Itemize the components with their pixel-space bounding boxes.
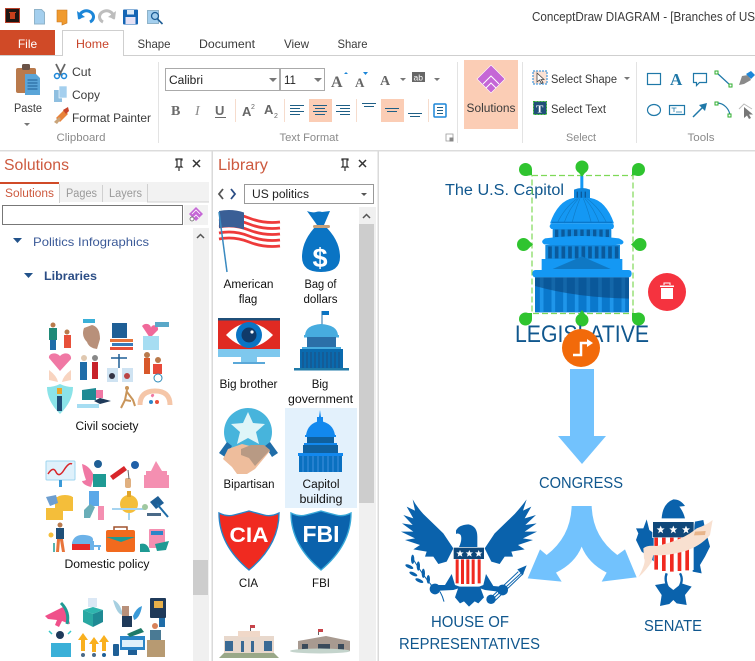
label: Domestic policy: Domestic policy (64, 559, 150, 571)
button: connector (562, 329, 600, 367)
label: Bipartisan: Bipartisan (224, 479, 274, 491)
library item: CIA (219, 511, 279, 590)
icon: new document (34, 10, 44, 24)
icons: paragraph alignment (290, 99, 446, 122)
text: HOUSE OF REPRESENTATIVES (399, 614, 540, 653)
library item: Bag of dollars: dollars (304, 294, 338, 306)
icon: curve tool (715, 102, 731, 117)
icon: selected U.S. Capitol building (532, 176, 633, 314)
library: elections (45, 598, 166, 657)
icon: FBI shield: FBI (302, 521, 340, 547)
icon: save (123, 10, 138, 24)
dropdown: US politics (244, 184, 374, 204)
text: HOUSE OF REPRESENTATIVES: HOUSE OF (431, 614, 509, 631)
foliage (636, 519, 654, 562)
label: Capitol building: Capitol (302, 479, 340, 491)
icon: arrow tool (693, 103, 707, 117)
text: HOUSE OF REPRESENTATIVES: REPRESENTATIVES (399, 636, 540, 653)
ribbon button: Solutions: Solutions (466, 103, 516, 115)
library item: Big government (288, 311, 354, 406)
icons: superscript and subscript: A (242, 104, 252, 119)
label: FBI: FBI (312, 578, 330, 590)
label: American flag: American (224, 279, 274, 291)
text: CONGRESS: CONGRESS (539, 475, 623, 492)
thumbnails: civil society icons (47, 319, 170, 414)
tab: View: View (284, 37, 309, 51)
icon: pen tool (739, 71, 755, 85)
panel: Library (218, 157, 376, 661)
library item: Big government: government (288, 394, 354, 406)
library item: FBI (291, 511, 351, 590)
icon: select shape (533, 71, 547, 84)
eagle head (662, 499, 685, 518)
icons: bold italic underline: B (171, 104, 180, 119)
icon: callout tool (694, 74, 706, 86)
ribbon button: Solutions (464, 60, 518, 129)
panel: Solutions (0, 157, 209, 661)
library item: Bipartisan (219, 408, 278, 491)
icon: shield with banner (Senate) (636, 499, 713, 606)
icon: solutions diamond (477, 65, 505, 93)
arrow: legislative to congress (558, 369, 606, 464)
icon: close (193, 160, 200, 167)
tab: File (0, 30, 55, 55)
quick access toolbar (6, 8, 162, 25)
scrollbar (359, 207, 376, 661)
right wing (485, 499, 537, 564)
icon: format painter (54, 107, 69, 124)
icon: select text: T (536, 104, 544, 116)
icons: superscript and subscript: 2 (274, 113, 278, 120)
font size dropdown (280, 68, 324, 90)
library item: Capitol building (selected): building (300, 494, 342, 506)
label: Select Text: Select Text (551, 104, 607, 116)
icons: font grow and shrink: A (331, 74, 343, 91)
icon: paste (16, 64, 40, 95)
icon: money bag: $ (312, 243, 328, 273)
ribbon (638, 520, 713, 577)
library item: Federal Reserve building (219, 625, 279, 658)
font name dropdown: Calibri (169, 75, 203, 87)
label: Big government: Big (312, 379, 328, 391)
icon: eagle with shield (House of Representatives) (401, 499, 537, 607)
tab: Solutions: Solutions (5, 188, 54, 200)
navigation arrows (219, 189, 223, 199)
icons: bold italic underline: U (215, 103, 224, 118)
label: Copy: Copy (72, 90, 100, 102)
library item: Big brother (218, 318, 280, 391)
tree item: Libraries (24, 269, 97, 283)
ribbon group: Clipboard (14, 64, 151, 144)
icon: redo (99, 11, 116, 22)
heading: Library: Library (218, 157, 268, 174)
arrow: split to house and senate (528, 506, 637, 582)
font name dropdown (166, 68, 280, 90)
library: Civil society (47, 319, 170, 433)
icon: cut (54, 64, 66, 78)
tab bar (0, 182, 209, 203)
icon: handshake with star (219, 408, 278, 474)
library: Domestic policy (46, 460, 169, 571)
icon: text tool: A (670, 70, 683, 89)
font size dropdown: 11 (284, 75, 296, 87)
tab: Share: Share (338, 37, 368, 51)
label: Bag of dollars: Bag of (304, 279, 337, 291)
tab: File: File (18, 37, 37, 51)
icon: government building (294, 311, 349, 370)
eagle shield (453, 547, 484, 559)
legs and tail (430, 574, 462, 591)
icon: text box tool (670, 106, 684, 114)
icon: CIA shield: CIA (230, 524, 268, 547)
ribbon group: Text Format (166, 68, 454, 144)
icon: copy (54, 86, 67, 102)
icon: undo (77, 11, 94, 22)
library item: Capitol building (selected) (285, 408, 357, 508)
icon: monitor with eye (218, 318, 280, 364)
ribbon tabs (0, 30, 755, 56)
dropdown: US politics: US politics (252, 189, 309, 201)
canvas: branches of US government diagram (399, 160, 713, 653)
text: The U.S. Capitol: The U.S. Capitol (445, 182, 564, 199)
text: SENATE: SENATE (644, 618, 702, 635)
icons: font grow and shrink: A (355, 75, 365, 90)
icon: pin (176, 159, 182, 171)
crossed arrows (666, 573, 682, 588)
search box (2, 206, 182, 224)
tab: Layers: Layers (109, 188, 142, 200)
button: delete (648, 273, 686, 311)
label: Select Shape: Select Shape (551, 74, 617, 86)
icons: font color and highlight: ab (414, 72, 423, 82)
icon: node tool (739, 104, 753, 119)
ribbon group: Select (533, 71, 630, 144)
library item: Bag of dollars (302, 211, 340, 306)
tab: Document: Document (199, 37, 256, 51)
laurel branch (405, 555, 433, 587)
icon: rectangle tool (648, 74, 660, 84)
icons: font color and highlight (380, 72, 440, 89)
icon: app logo (6, 8, 20, 22)
arrows bundle (490, 572, 523, 602)
tab: Pages: Pages (66, 188, 97, 200)
icon: capitol building (298, 410, 343, 472)
label: Tools: Tools (688, 132, 715, 144)
label: Text Format: Text Format (280, 132, 338, 144)
label: Paste: Paste (14, 103, 42, 115)
label: Civil society: Civil society (76, 421, 139, 433)
icon: close (359, 160, 366, 167)
label: Select: Select (566, 132, 596, 144)
icon: print preview (148, 10, 162, 24)
icon: american flag (219, 210, 280, 272)
tab: Home: Home (76, 37, 109, 51)
icons: superscript and subscript: 2 (251, 104, 255, 111)
icons: superscript and subscript: A (264, 102, 274, 117)
label: Format Painter: Format Painter (72, 113, 151, 125)
library item: American flag: flag (239, 294, 257, 306)
library item: Treasury building (290, 629, 350, 654)
scrollbar (193, 228, 209, 661)
senate shield (653, 522, 694, 538)
icons: font color and highlight: A (380, 74, 391, 89)
ribbon group: Tools (648, 70, 755, 144)
icons: bold italic underline: I (194, 104, 201, 119)
text: LEGISLATIVE: LEGISLATIVE (515, 321, 649, 348)
icon: line tool (715, 71, 732, 87)
label: Clipboard: Clipboard (56, 132, 106, 144)
eagle head (456, 524, 477, 548)
icon: ellipse tool (648, 104, 660, 116)
icon: pin (342, 159, 348, 171)
thumbnails: domestic policy icons (46, 460, 169, 552)
icons: font grow and shrink (331, 72, 368, 91)
icon: open folder (57, 10, 67, 25)
heading: Solutions: Solutions (4, 157, 69, 174)
tree item: Politics Infographics: Politics Infographics (33, 235, 149, 249)
left wing (401, 499, 453, 564)
icons: bold italic underline (171, 103, 226, 119)
tree item: Libraries: Libraries (44, 269, 97, 283)
label: Big brother: Big brother (220, 379, 278, 391)
selection handles (517, 160, 646, 326)
icons: superscript and subscript (242, 102, 278, 120)
icon: search solutions (184, 205, 208, 225)
library item: American flag (219, 210, 280, 306)
label: CIA: CIA (239, 578, 258, 590)
label: Cut: Cut (72, 67, 92, 79)
tab: Shape: Shape (138, 37, 171, 51)
